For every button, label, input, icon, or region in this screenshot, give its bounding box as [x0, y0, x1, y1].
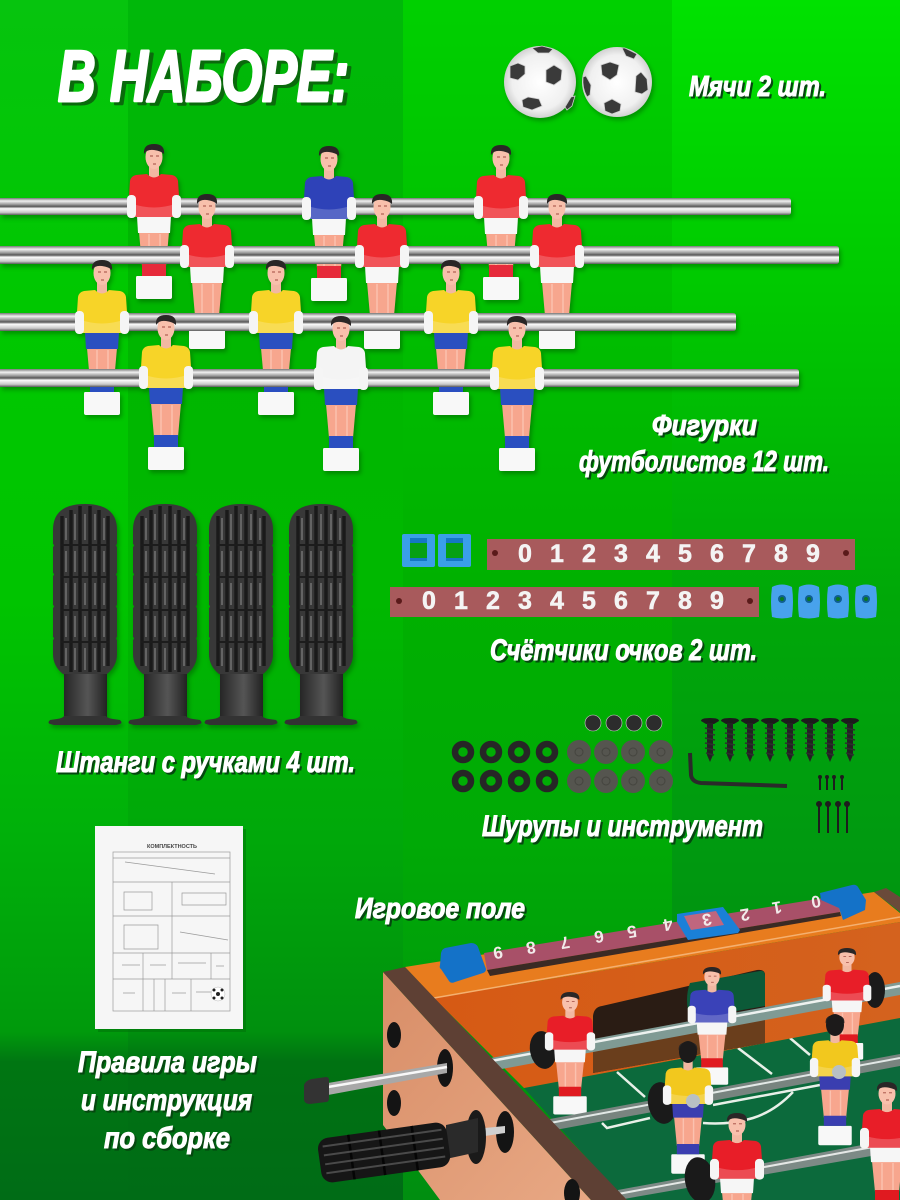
score slider	[677, 907, 740, 940]
label: instructions	[78, 1046, 257, 1155]
label: balls: Мячи 2 шт.	[689, 71, 826, 103]
field surface	[524, 1018, 900, 1200]
middle rod	[550, 1054, 900, 1131]
score counters: 1	[454, 587, 468, 615]
blue clips	[440, 943, 486, 983]
rail digits: 6	[593, 926, 605, 947]
label: figures: Фигурки	[652, 410, 757, 442]
title: В НАБОРЕ:	[58, 37, 349, 117]
score counters: 8	[774, 540, 788, 568]
icon: two soccer balls	[504, 46, 652, 118]
back row figures	[545, 992, 595, 1114]
top edge	[405, 892, 900, 998]
front figures	[710, 1113, 764, 1200]
score counters: 7	[742, 540, 756, 568]
score counters: 2	[486, 587, 500, 615]
playing field table	[304, 885, 900, 1200]
rail digits: 0	[810, 891, 822, 912]
label: instructions: и инструкция	[81, 1084, 252, 1117]
score counters	[390, 534, 877, 618]
score counters: 4	[646, 540, 660, 568]
score rail	[484, 896, 840, 970]
score counters: 9	[710, 587, 724, 615]
score counters: 2	[582, 540, 596, 568]
score counters: 6	[710, 540, 724, 568]
front rod	[618, 1138, 900, 1200]
label: figures	[579, 410, 829, 478]
label: counters: Счётчики очков 2 шт.	[490, 634, 757, 667]
foosball figures on rods	[0, 144, 839, 471]
label: screws: Шурупы и инструмент	[482, 810, 763, 843]
rail digits: 2	[739, 904, 751, 925]
middle bumper	[645, 1080, 679, 1126]
rail digits: 8	[525, 937, 537, 958]
yellow figures	[663, 1042, 713, 1174]
field markings	[602, 1038, 820, 1128]
instruction booklet: КОМПЛЕКТНОСТЬ	[147, 844, 197, 850]
label: instructions: по сборке	[104, 1122, 230, 1155]
black grip handle	[317, 1110, 514, 1184]
side panel	[383, 972, 591, 1200]
label: playing field: Игровое поле	[355, 893, 525, 925]
rail digits: 7	[559, 932, 571, 953]
dark edge strip	[383, 967, 627, 1200]
label: instructions: Правила игры	[78, 1046, 257, 1079]
label: handles: Штанги с ручками 4 шт.	[56, 746, 355, 779]
back rod	[491, 982, 900, 1071]
score counters: 1	[550, 540, 564, 568]
rods with handles	[48, 504, 358, 725]
instruction booklet	[95, 826, 246, 1032]
score counters: 6	[614, 587, 628, 615]
score counters: 0	[518, 540, 532, 568]
score counters: 5	[582, 587, 596, 615]
back bumpers	[527, 1029, 559, 1071]
rail digits: 9	[492, 942, 504, 963]
rail digits	[492, 891, 822, 963]
rail digits: 4	[661, 914, 674, 935]
score counters: 3	[518, 587, 532, 615]
bolts	[387, 1022, 401, 1048]
left rod and knob	[328, 1063, 447, 1095]
rail digits: 5	[626, 921, 638, 942]
score counters: 5	[678, 540, 692, 568]
screws and tools	[455, 715, 859, 833]
score counters: 8	[678, 587, 692, 615]
score counters: 0	[422, 587, 436, 615]
front bumper	[681, 1155, 719, 1200]
score counters: 4	[550, 587, 564, 615]
playing field table: 3	[701, 909, 713, 930]
score counters: 9	[806, 540, 820, 568]
rail digits: 1	[771, 897, 783, 918]
back wall	[434, 922, 900, 1088]
goal opening	[593, 970, 765, 1073]
label: figures: футболистов 12 шт.	[579, 446, 829, 478]
score counters: 7	[646, 587, 660, 615]
score counters: 3	[614, 540, 628, 568]
